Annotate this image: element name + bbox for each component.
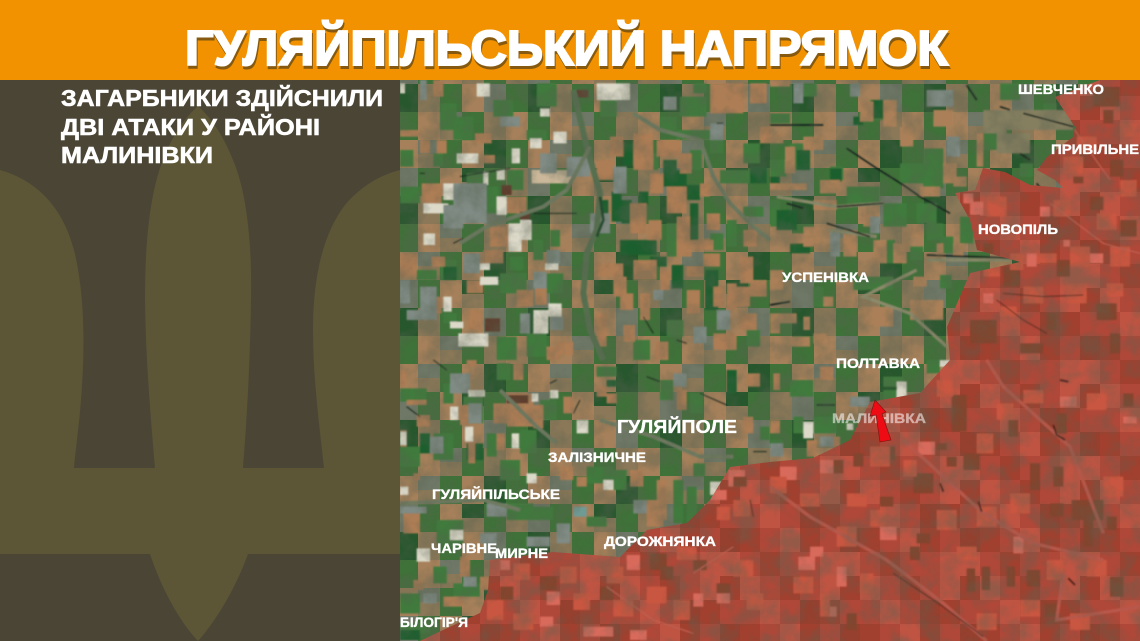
label: Шевченко: ШЕВЧЕНКО (1018, 81, 1104, 97)
label: Чарівне: ЧАРІВНЕ (431, 540, 497, 556)
occupied territory: red overlay (400, 80, 1140, 641)
text block: situation summary: ЗАГАРБНИКИ ЗДІЙСНИЛИ (61, 84, 383, 111)
label: Новопіль: НОВОПІЛЬ (978, 221, 1058, 237)
map fields: southeast green corner (770, 360, 950, 457)
text block: situation summary: МАЛИНІВКИ (61, 142, 213, 168)
label: Мирне: МИРНЕ (495, 545, 548, 561)
text block: situation summary (61, 84, 383, 168)
red fields: northeast (963, 87, 1140, 353)
map fields: northeast quadrant (770, 80, 1073, 347)
label: Привільне: ПРИВІЛЬНЕ (1051, 141, 1139, 157)
label: Полтавка: ПОЛТАВКА (836, 355, 920, 371)
title: ГУЛЯЙПІЛЬСЬКИЙ НАПРЯМОК (185, 21, 948, 76)
label: Успенівка: УСПЕНІВКА (782, 269, 869, 285)
label: Гуляйпільське: ГУЛЯЙПІЛЬСЬКЕ (432, 485, 560, 502)
red fields: southeast (770, 360, 1140, 641)
map fields: northwest quadrant (400, 80, 770, 360)
red fields: southwest (487, 470, 763, 640)
label: Білогір'я: БІЛОГІР'Я (400, 614, 468, 630)
arrow: attack direction near Malynivka (870, 400, 891, 442)
label: Залізничне: ЗАЛІЗНИЧНЕ (548, 449, 646, 465)
icon: trident emblem (0, 106, 400, 641)
label: Дорожнянка: ДОРОЖНЯНКА (604, 533, 716, 549)
texture over the whole map (400, 80, 1140, 641)
label: Гуляйполе: ГУЛЯЙПОЛЕ (617, 416, 737, 437)
label: Малинівка: МАЛИНІВКА (832, 410, 926, 426)
text block: situation summary: ДВІ АТАКИ У РАЙОНІ (61, 113, 320, 140)
header band (0, 0, 1140, 80)
panel: left background with trident (0, 80, 400, 641)
satellite map (400, 80, 1140, 641)
map fields: southwest quadrant (400, 360, 770, 640)
